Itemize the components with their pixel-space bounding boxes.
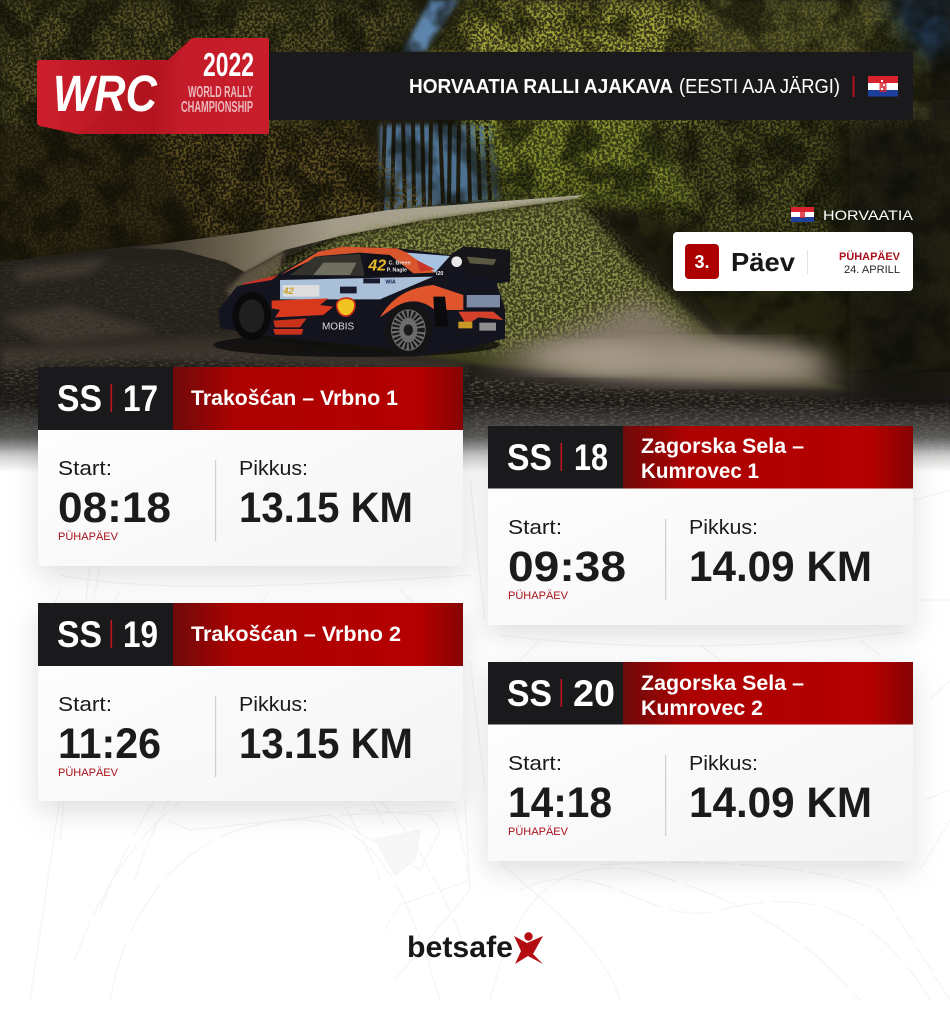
WRC 2022 logo: WORLD RALLY bbox=[188, 84, 253, 101]
stage card: SS 17: 13.15 KM bbox=[239, 484, 413, 532]
car: decals: 42 bbox=[367, 258, 386, 275]
photo: sky bbox=[380, 0, 950, 212]
car: decals: P. Nagle bbox=[387, 267, 407, 273]
day number badge: 3. bbox=[694, 252, 710, 272]
stage card: SS 19 bbox=[38, 603, 463, 801]
car: decals: C. Breen bbox=[389, 260, 411, 266]
car: decals bbox=[282, 258, 443, 332]
car: rear wheel bbox=[385, 303, 432, 357]
stage card: SS 20: 14.09 KM bbox=[689, 779, 872, 827]
background: topographic contour lines bbox=[30, 480, 950, 1000]
car: decals: WIA bbox=[385, 279, 396, 285]
photo: dust cloud bbox=[480, 300, 860, 385]
stage card: SS 19: SS bbox=[57, 614, 102, 655]
car: front wheel bbox=[232, 292, 271, 340]
photo: sunlit foliage speckles bbox=[0, 0, 950, 320]
car: decals: MOBIS bbox=[322, 321, 355, 332]
stage card: SS 18: Zagorska Sela – bbox=[641, 435, 804, 458]
country label: Horvaatia: HORVAATIA bbox=[823, 207, 914, 223]
photo: dark forest ground and dirt road bbox=[0, 195, 582, 375]
stage card: SS 17: Start: bbox=[58, 457, 112, 480]
day card: 3. Päev bbox=[673, 232, 913, 291]
title text: HORVAATIA RALLI AJAKAVA bbox=[409, 76, 673, 98]
stage card: SS 19: Start: bbox=[58, 693, 112, 716]
car: decals: 42 bbox=[282, 286, 295, 296]
subtitle text: (EESTI AJA JÄRGI) bbox=[679, 76, 840, 98]
stage card: SS 19: Pikkus: bbox=[239, 693, 308, 716]
photo: canopy base tones bbox=[427, 0, 931, 214]
photo: tree trunks bbox=[382, 120, 490, 212]
stage card: SS 20 bbox=[488, 662, 913, 861]
stage card: SS 18 bbox=[488, 426, 913, 625]
stage card: SS 20: SS bbox=[507, 673, 552, 714]
day card: 3. Päev: PÜHAPÄEV bbox=[839, 250, 901, 263]
stage card: SS 18: 14.09 KM bbox=[689, 543, 872, 591]
stage card: SS 20: Pikkus: bbox=[689, 752, 758, 775]
icon: betsafe figure bbox=[514, 932, 543, 964]
stage card: SS 17: PÜHAPÄEV bbox=[58, 531, 119, 543]
stage card: SS 19: 19 bbox=[123, 614, 158, 655]
stage card: SS 19: 13.15 KM bbox=[239, 720, 413, 768]
photo: gravel texture bbox=[0, 262, 950, 450]
stage card: SS 17: 17 bbox=[123, 378, 158, 419]
stage card: SS 18: PÜHAPÄEV bbox=[508, 590, 569, 602]
stage card: SS 18: 09:38 bbox=[508, 543, 626, 591]
icon: Croatian flag bbox=[868, 76, 898, 96]
photo fade overlays bbox=[0, 383, 950, 450]
stage card: SS 17: 08:18 bbox=[58, 484, 171, 532]
stage card: SS 20: 20 bbox=[573, 673, 615, 714]
stage card: SS 20: PÜHAPÄEV bbox=[508, 826, 569, 838]
photo: foliage light and shade mottling bbox=[0, 0, 950, 372]
photo: rally car on gravel road in forest bbox=[0, 0, 950, 480]
stage card: SS 18: 18 bbox=[574, 437, 608, 478]
stage card: SS 18: Kumrovec 1 bbox=[641, 460, 759, 483]
stage card: SS 17 bbox=[38, 367, 463, 566]
day card: 3. Päev: 24. APRILL bbox=[844, 264, 900, 276]
stage card: SS 17: SS bbox=[57, 378, 102, 419]
country label: Horvaatia bbox=[791, 207, 914, 223]
car: decals: i20 bbox=[436, 271, 443, 277]
WRC 2022 logo: 2022 bbox=[203, 46, 254, 83]
stage card: SS 19: PÜHAPÄEV bbox=[58, 767, 119, 779]
stage card: SS 18: Pikkus: bbox=[689, 516, 758, 539]
stage card: SS 19: Trakošćan – Vrbno 2 bbox=[191, 623, 401, 646]
stage card: SS 20: Kumrovec 2 bbox=[641, 697, 763, 720]
stage card: SS 17: Pikkus: bbox=[239, 457, 308, 480]
stage card: SS 17: Trakošćan – Vrbno 1 bbox=[191, 387, 398, 410]
photo: grassy bank bbox=[240, 199, 850, 390]
header bar: schedule title bbox=[265, 52, 913, 120]
WRC 2022 logo bbox=[37, 38, 269, 134]
stage card: SS 18: Start: bbox=[508, 516, 562, 539]
photo: dark vignette on the right edge bbox=[850, 100, 950, 400]
day card: 3. Päev: Päev bbox=[731, 247, 796, 277]
stage card: SS 20: Zagorska Sela – bbox=[641, 672, 804, 695]
stage card: SS 18: SS bbox=[507, 437, 552, 478]
WRC 2022 logo: WRC bbox=[53, 65, 158, 122]
icon: Croatian flag small bbox=[791, 207, 814, 222]
betsafe logo: betsafe bbox=[407, 931, 513, 964]
stage card: SS 20: Start: bbox=[508, 752, 562, 775]
stage card: SS 19: 11:26 bbox=[58, 720, 161, 768]
WRC 2022 logo: CHAMPIONSHIP bbox=[181, 99, 253, 116]
stage card: SS 20: 14:18 bbox=[508, 779, 612, 827]
rally car bbox=[213, 247, 510, 357]
day number badge bbox=[685, 244, 719, 279]
